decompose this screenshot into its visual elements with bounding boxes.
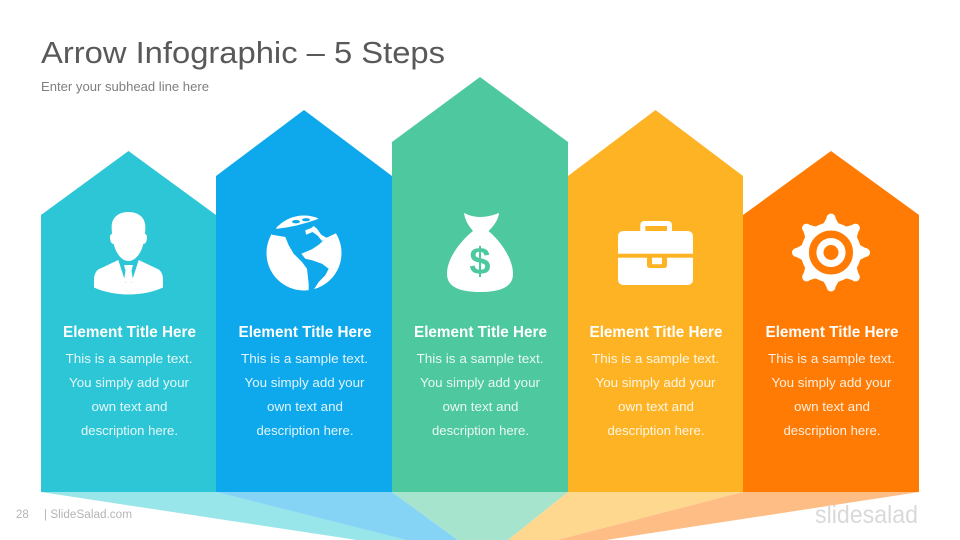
step 5 description: You simply add your [772, 376, 892, 390]
step 3 description [416, 352, 544, 438]
step 3 description: You simply add your [420, 376, 540, 390]
step 5 title: Element Title Here [766, 324, 899, 341]
step 1 description: description here. [81, 424, 178, 438]
step 3 description: description here. [432, 424, 529, 438]
step 1 description: This is a sample text. [66, 352, 192, 366]
icon: money bag: $ [469, 241, 491, 283]
step 2 description: description here. [256, 424, 354, 438]
arrow shape 4 [568, 110, 743, 492]
step 1 description: You simply add your [69, 376, 189, 390]
step 3 description: own text and [442, 400, 519, 414]
icon: briefcase [618, 221, 693, 285]
step 4 description: description here. [608, 424, 704, 438]
step 4 description: This is a sample text. [592, 352, 719, 366]
arrow shape 1 [41, 151, 216, 492]
subhead: Enter your subhead line here [41, 80, 209, 94]
panel: step 4 [568, 110, 743, 492]
title: Arrow Infographic – 5 Steps [41, 35, 445, 70]
arrow shape 2 [216, 110, 392, 492]
arrow shape 3 [392, 77, 568, 492]
step 4 description [592, 352, 719, 438]
footer page number: 28 [16, 509, 29, 521]
step 4 description: You simply add your [596, 376, 716, 390]
step 5 description: description here. [784, 424, 880, 438]
footer site name: | SlideSalad.com [44, 509, 132, 521]
step 1 description [66, 352, 192, 438]
icon: businessman [94, 212, 163, 294]
arrow shape 5 [743, 151, 919, 492]
panel: step 1 [41, 151, 216, 492]
step 5 description: This is a sample text. [768, 352, 895, 366]
step 2 description: This is a sample text. [241, 352, 368, 366]
fan: light reflection under the arrows [41, 492, 919, 540]
step 1 description: own text and [92, 400, 168, 414]
step 5 description: own text and [794, 400, 870, 414]
logo wordmark: slidesalad [815, 501, 918, 529]
panel: step 5 [743, 151, 919, 492]
panel: step 3 [392, 77, 568, 492]
step 2 title: Element Title Here [238, 324, 372, 341]
step 2 description: You simply add your [244, 376, 364, 390]
icon: money bag [447, 213, 513, 292]
step 1 title: Element Title Here [63, 324, 196, 341]
step 2 description [241, 352, 368, 438]
step 3 title: Element Title Here [414, 324, 547, 341]
panel: step 2 [216, 110, 392, 492]
step 5 description [768, 352, 895, 438]
icon: gear [792, 214, 870, 292]
icon: globe [266, 210, 345, 292]
step 2 description: own text and [267, 400, 343, 414]
step 4 title: Element Title Here [590, 324, 723, 341]
step 4 description: own text and [618, 400, 694, 414]
step 3 description: This is a sample text. [416, 352, 544, 366]
